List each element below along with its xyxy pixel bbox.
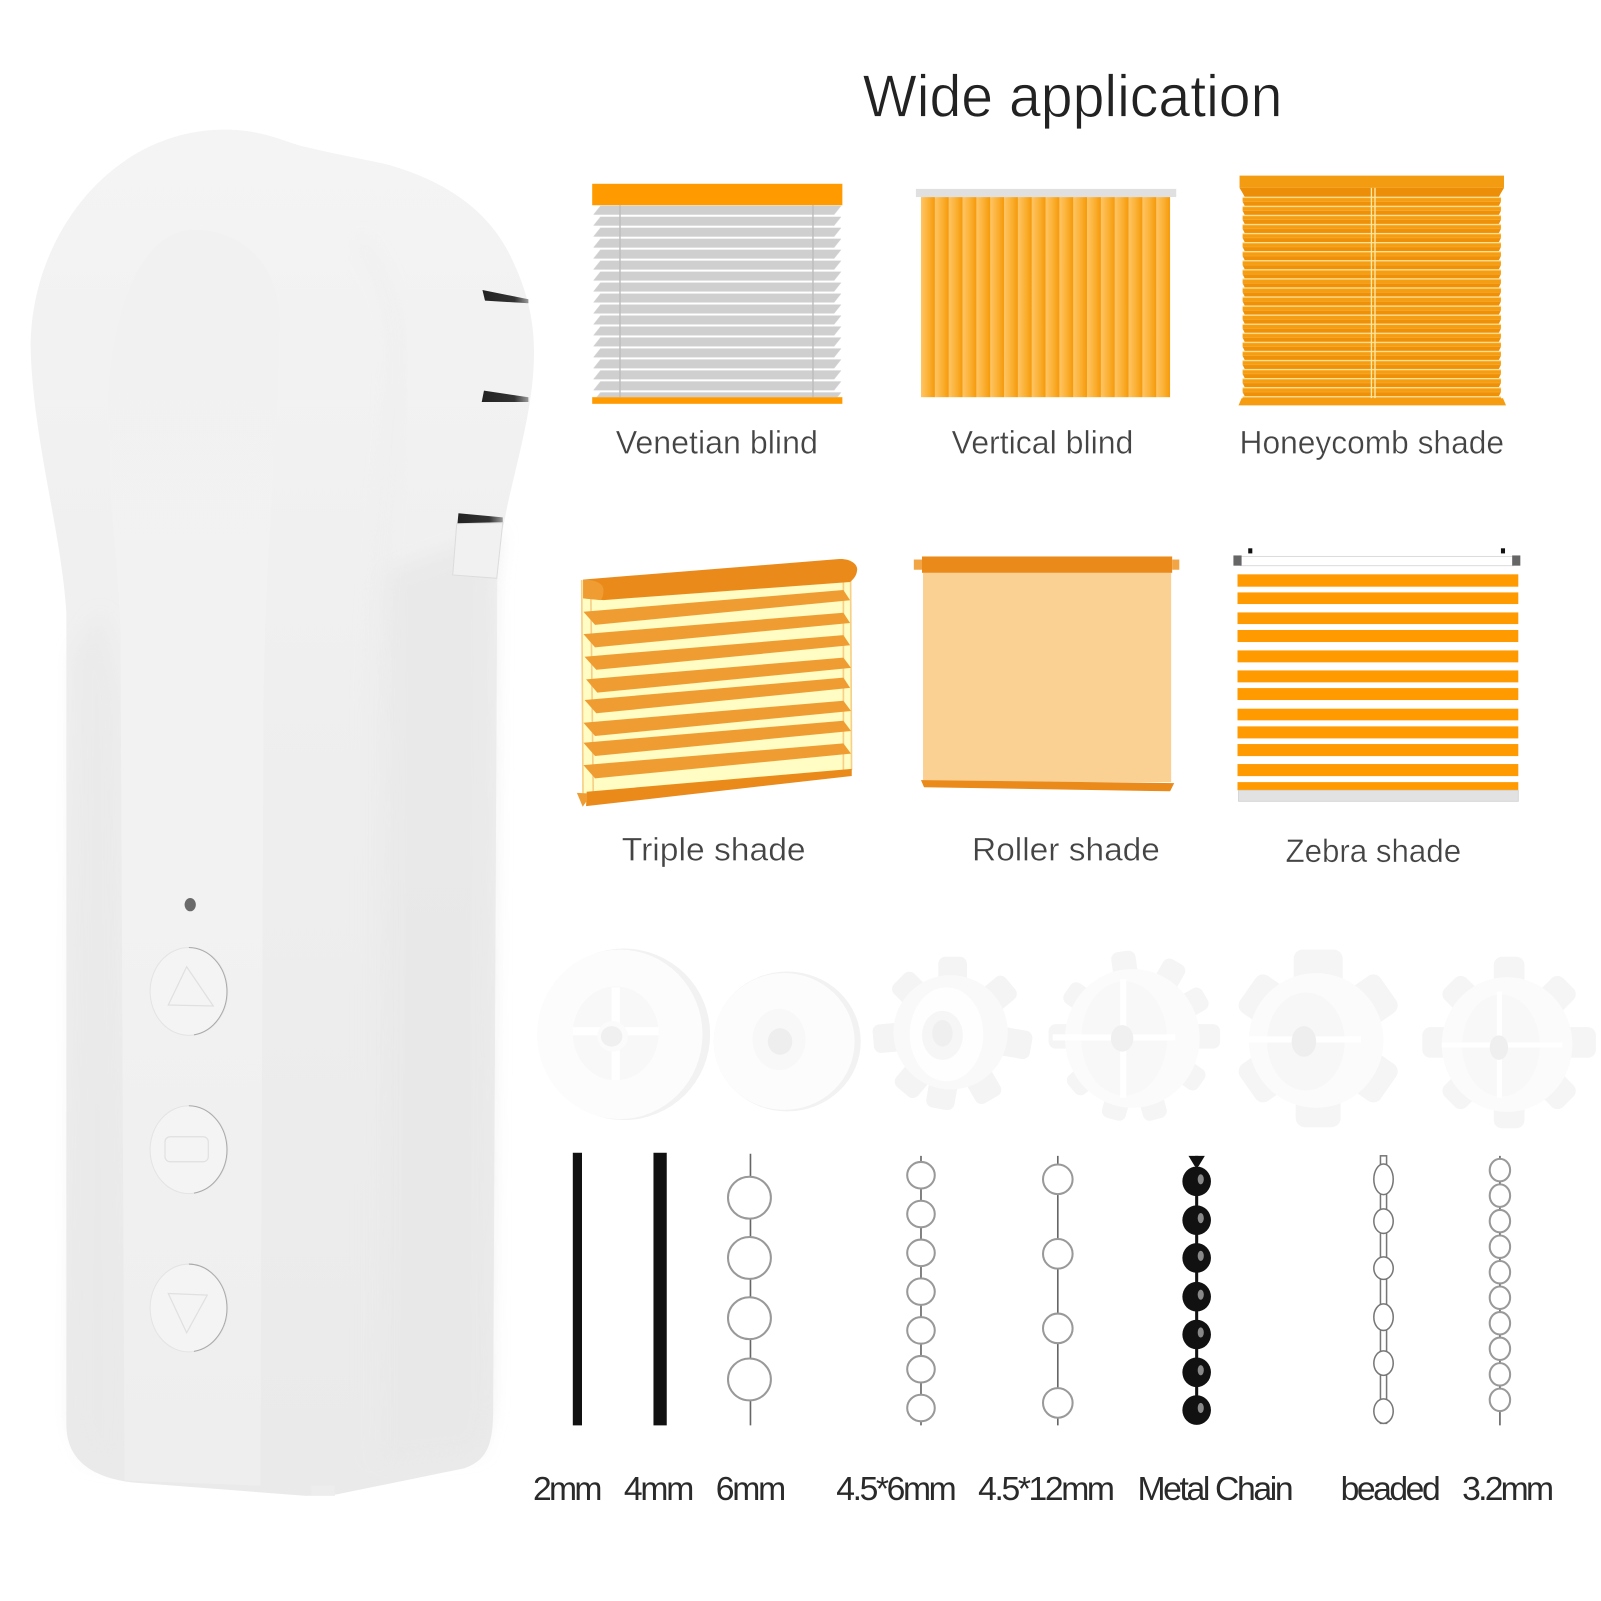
device front panel (107, 230, 280, 1486)
label: honeycomb shade: Honeycomb shade (1240, 423, 1504, 460)
device upper contour (359, 240, 396, 1460)
label: 6mm: 6mm (716, 1471, 786, 1508)
chain: 4.5*6mm (907, 1156, 935, 1425)
label: venetian blind: Venetian blind (616, 423, 818, 460)
label: 4.5*12mm: 4.5*12mm (978, 1471, 1115, 1508)
label: 2mm: 2mm (533, 1471, 602, 1508)
label: beaded: beaded (1341, 1471, 1441, 1508)
label: triple shade: Triple shade (622, 831, 806, 868)
panel: roller shade (914, 556, 1179, 791)
panel: triple shade (577, 559, 857, 807)
panel: honeycomb shade (1239, 176, 1506, 405)
device body (31, 130, 534, 1496)
product: motorized blind controller (31, 130, 534, 1496)
label: roller shade: Roller shade (972, 831, 1160, 868)
cord: 4mm (653, 1153, 667, 1425)
panel: venetian blind (592, 184, 842, 404)
label: 4mm: 4mm (624, 1471, 694, 1508)
indicator LED (185, 898, 196, 911)
pulley: toothed gear two (1049, 950, 1220, 1122)
chain: 4.5*12mm (1043, 1156, 1073, 1425)
pulley: toothed gear four (1422, 957, 1596, 1128)
cord: 2mm (573, 1153, 582, 1425)
label: 4.5*6mm: 4.5*6mm (836, 1471, 957, 1508)
title: Wide application (863, 62, 1282, 129)
panel: vertical blind (916, 189, 1176, 397)
slit three (457, 513, 503, 524)
label: 3.2mm: 3.2mm (1462, 1471, 1554, 1508)
device left shading (71, 613, 125, 1465)
pulley: toothed gear one (872, 957, 1034, 1111)
chain: 3.2mm (1490, 1156, 1510, 1425)
chain: metal (1182, 1156, 1211, 1425)
label: vertical blind: Vertical blind (952, 423, 1133, 460)
chain: beaded (1374, 1156, 1393, 1423)
pulley: smooth wheel large (537, 949, 710, 1120)
button: down (150, 1264, 228, 1352)
bottom tab (311, 1486, 335, 1496)
slit one (482, 290, 528, 303)
device side shading (380, 531, 500, 1462)
label: Metal Chain: Metal Chain (1137, 1471, 1294, 1508)
button: up (150, 948, 228, 1035)
pulley: smooth wheel small (714, 972, 861, 1111)
slit two (482, 391, 528, 402)
panel: zebra shade (1233, 548, 1520, 801)
label: zebra shade: Zebra shade (1285, 832, 1461, 869)
button: stop (150, 1106, 228, 1194)
chain: 6mm (728, 1154, 771, 1425)
side switch (453, 523, 503, 578)
pulley: toothed gear three (1235, 950, 1401, 1127)
